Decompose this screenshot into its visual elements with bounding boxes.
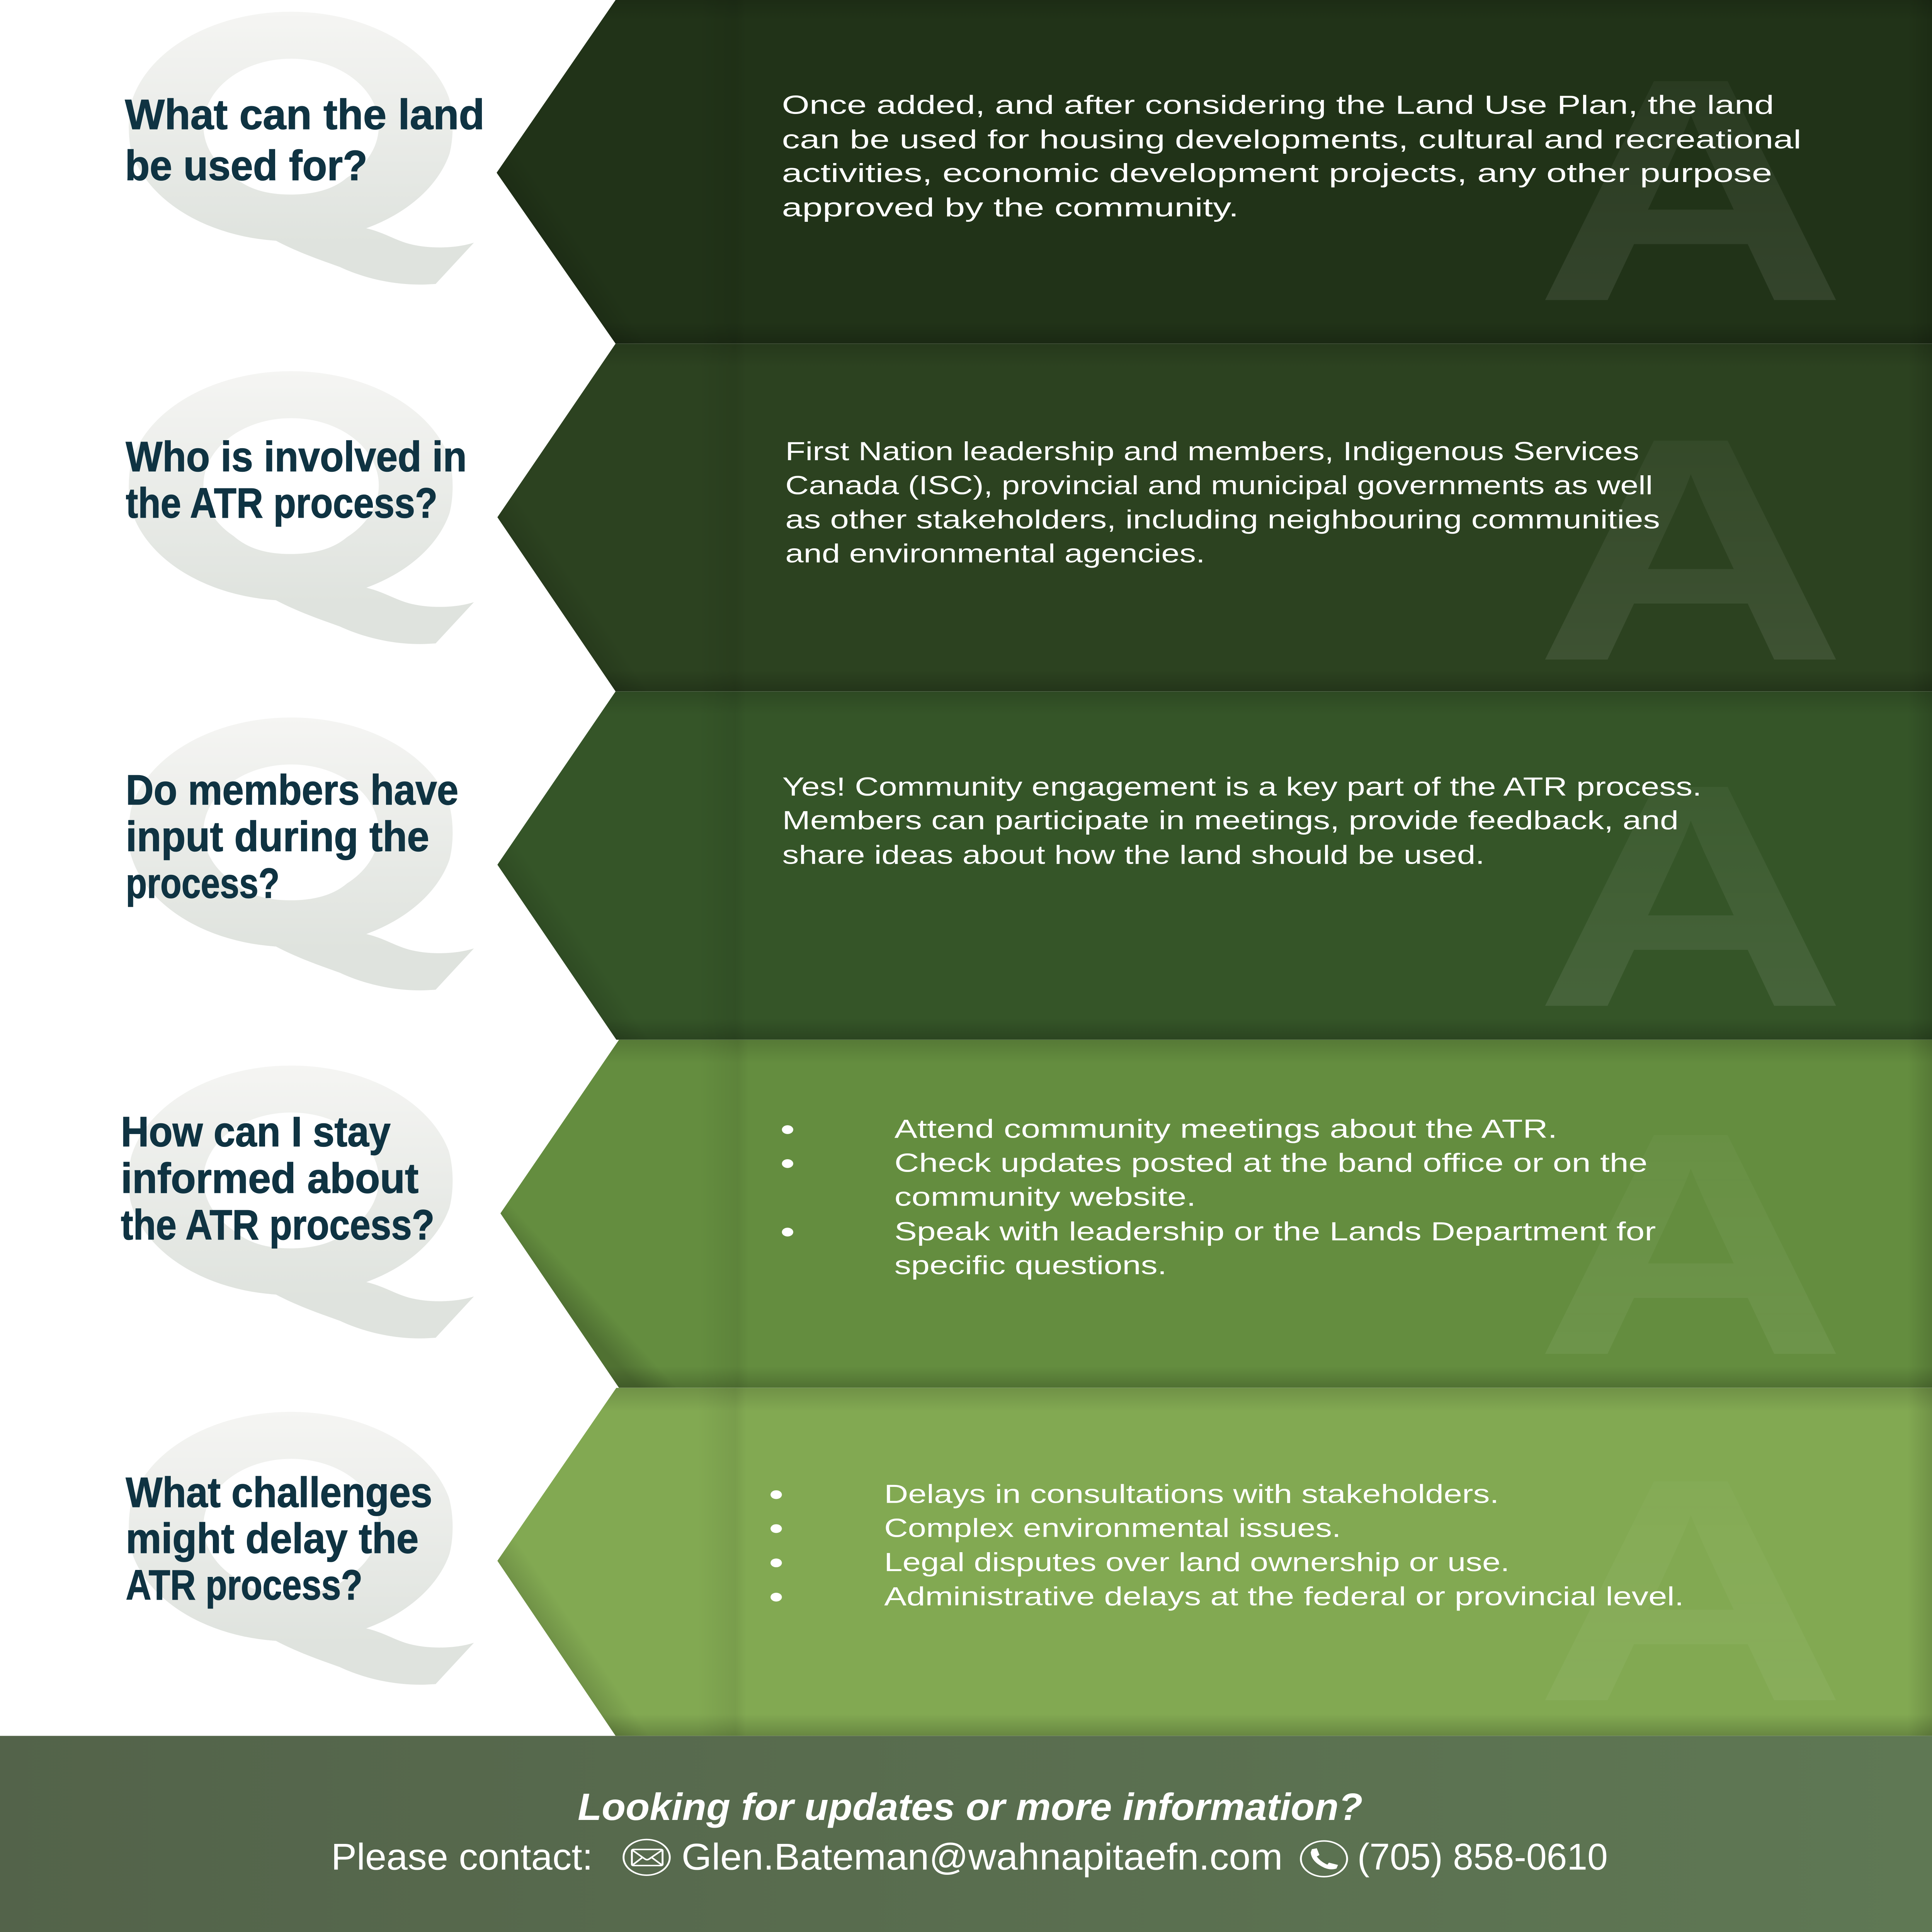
watermark letter A, row 3: A: [1534, 718, 1847, 1073]
question 3: input during the: [126, 813, 429, 860]
panel: answer 5 chevron: [493, 1388, 1932, 1736]
contact label: Please contact:: [331, 1836, 593, 1878]
answer 1 text: [782, 90, 1801, 222]
answer 2 text: as other stakeholders, including neighbouring communities: [785, 505, 1660, 534]
answer 2 text: First Nation leadership and members, Indigenous Services: [785, 437, 1639, 466]
question 3: process?: [126, 859, 280, 907]
panel: answer 1 chevron: [493, 0, 1932, 344]
question 5: might delay the: [126, 1514, 418, 1562]
answer 3 text: [782, 772, 1702, 869]
answer 1 text: can be used for housing developments, cultural and recreational: [782, 125, 1801, 154]
question 3: [126, 766, 458, 907]
answer 4 bulleted list: specific questions.: [895, 1250, 1167, 1280]
answer 5 bulleted list: Legal disputes over land ownership or use.: [884, 1548, 1510, 1577]
question 1: be used for?: [125, 141, 367, 189]
answer 5 bulleted list: Administrative delays at the federal or provincial level.: [884, 1582, 1684, 1611]
answer 4 bulleted list: Check updates posted at the band office or on the: [895, 1148, 1648, 1177]
question 5: [126, 1469, 432, 1609]
question 1: What can the land: [125, 91, 485, 138]
question 4: informed about: [121, 1155, 418, 1202]
email address: Glen.Bateman@wahnapitaefn.com: [682, 1836, 1283, 1878]
footer heading: Looking for updates or more information?: [578, 1786, 1362, 1828]
answer 1 text: approved by the community.: [782, 192, 1239, 222]
question 4: [121, 1108, 435, 1248]
watermark letter A, row 4: A: [1534, 1066, 1847, 1422]
panel: answer 4 chevron: [493, 1040, 1932, 1388]
question 2: Who is involved in: [126, 433, 467, 480]
answer 2 text: and environmental agencies.: [785, 539, 1205, 568]
watermark letter A, row 5: A: [1534, 1412, 1847, 1768]
watermark letter A, row 1: A: [1534, 12, 1847, 367]
watermark letter A, row 2: A: [1534, 371, 1847, 727]
phone number: (705) 858-0610: [1357, 1836, 1608, 1878]
watermark letter Q, row 3: Q: [122, 661, 460, 1005]
panel: answer 2 chevron: [493, 344, 1932, 691]
watermark letter Q, row 2: Q: [122, 315, 460, 659]
question 5: What challenges: [126, 1469, 432, 1516]
answer 2 text: Canada (ISC), provincial and municipal governments as well: [785, 470, 1653, 500]
watermark letter Q, row 5: Q: [122, 1355, 460, 1699]
footer band: [0, 1736, 1932, 1932]
question 4: How can I stay: [121, 1108, 391, 1155]
answer 5 bulleted list: Delays in consultations with stakeholders.: [884, 1479, 1499, 1509]
answer 2 text: [785, 437, 1660, 568]
question 1: [125, 91, 485, 189]
answer 5 bulleted list: Complex environmental issues.: [884, 1513, 1341, 1543]
question 4: the ATR process?: [121, 1201, 435, 1248]
answer 3 text: Yes! Community engagement is a key part of the ATR process.: [782, 772, 1702, 801]
answer 5 bulleted list: [770, 1479, 1684, 1611]
answer 4 bulleted list: Attend community meetings about the ATR.: [895, 1114, 1557, 1143]
icon: telephone: [1301, 1841, 1347, 1877]
answer 4 bulleted list: [782, 1114, 1656, 1280]
icon: email envelope: [624, 1840, 670, 1875]
question 2: [126, 433, 467, 527]
question 2: the ATR process?: [126, 479, 437, 527]
question 5: ATR process?: [126, 1561, 362, 1609]
answer 3 text: share ideas about how the land should be used.: [782, 840, 1485, 869]
panel: answer 3 chevron: [493, 691, 1932, 1040]
answer 1 text: Once added, and after considering the Land Use Plan, the land: [782, 90, 1774, 119]
answer 4 bulleted list: Speak with leadership or the Lands Department for: [895, 1216, 1656, 1246]
question 3: Do members have: [126, 766, 458, 813]
answer 1 text: activities, economic development projects, any other purpose: [782, 158, 1772, 188]
answer 3 text: Members can participate in meetings, provide feedback, and: [782, 806, 1679, 835]
answer 4 bulleted list: community website.: [895, 1182, 1196, 1211]
watermark letter Q, row 4: Q: [122, 1009, 460, 1353]
